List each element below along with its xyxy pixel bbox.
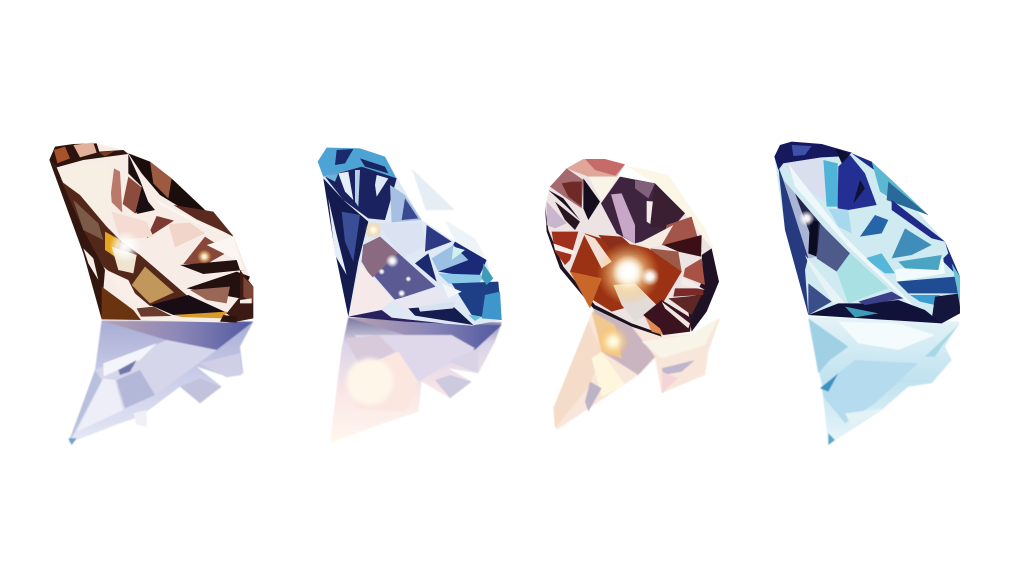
diamond 4: navy and cyan (774, 142, 960, 445)
glints (109, 231, 141, 263)
upper right dark band (128, 153, 233, 237)
right facets (892, 228, 932, 258)
crown dark section (325, 167, 397, 220)
diagonal white band (788, 163, 935, 317)
gem body (318, 148, 502, 326)
crown facets (110, 168, 122, 213)
reflection of diamond 2 (330, 318, 502, 443)
crown top facets (318, 148, 397, 179)
pavilion base (808, 283, 832, 315)
ghost facet (412, 168, 455, 210)
gem body (49, 143, 253, 323)
left dark pavilion (323, 178, 368, 317)
flare at top of galaxy band (365, 221, 382, 239)
pavilion base facets (348, 310, 445, 324)
crown top facets (774, 142, 852, 170)
starburst flare (597, 242, 660, 305)
gem body (774, 142, 960, 323)
ghost rim (625, 165, 717, 255)
reflection of diamond 1 (68, 321, 253, 445)
crown facets (783, 157, 832, 207)
white triangle (348, 263, 393, 317)
reflection of diamond 4 (808, 317, 960, 445)
diamond 1: brown (49, 143, 253, 445)
diamond 3: tilted red-brown (545, 159, 720, 430)
red-brown right crown (662, 217, 702, 252)
pavilion base facets (102, 287, 141, 320)
left pavilion (778, 167, 808, 315)
lower rim facets (643, 300, 692, 335)
purple upper crown (601, 177, 685, 243)
right side facets (183, 237, 228, 264)
diamond 2: blue (318, 148, 502, 443)
galaxy band (362, 237, 436, 300)
crown top facets (49, 143, 128, 167)
reflection of diamond 3 (553, 308, 720, 430)
right crown facets (390, 185, 422, 222)
left edge dark (49, 160, 105, 319)
right facets (438, 242, 487, 278)
gem body (545, 159, 719, 337)
sunburst centre (570, 233, 682, 312)
sparkle band (62, 182, 188, 306)
top rim facets (567, 159, 625, 177)
central lower facets (837, 253, 888, 303)
